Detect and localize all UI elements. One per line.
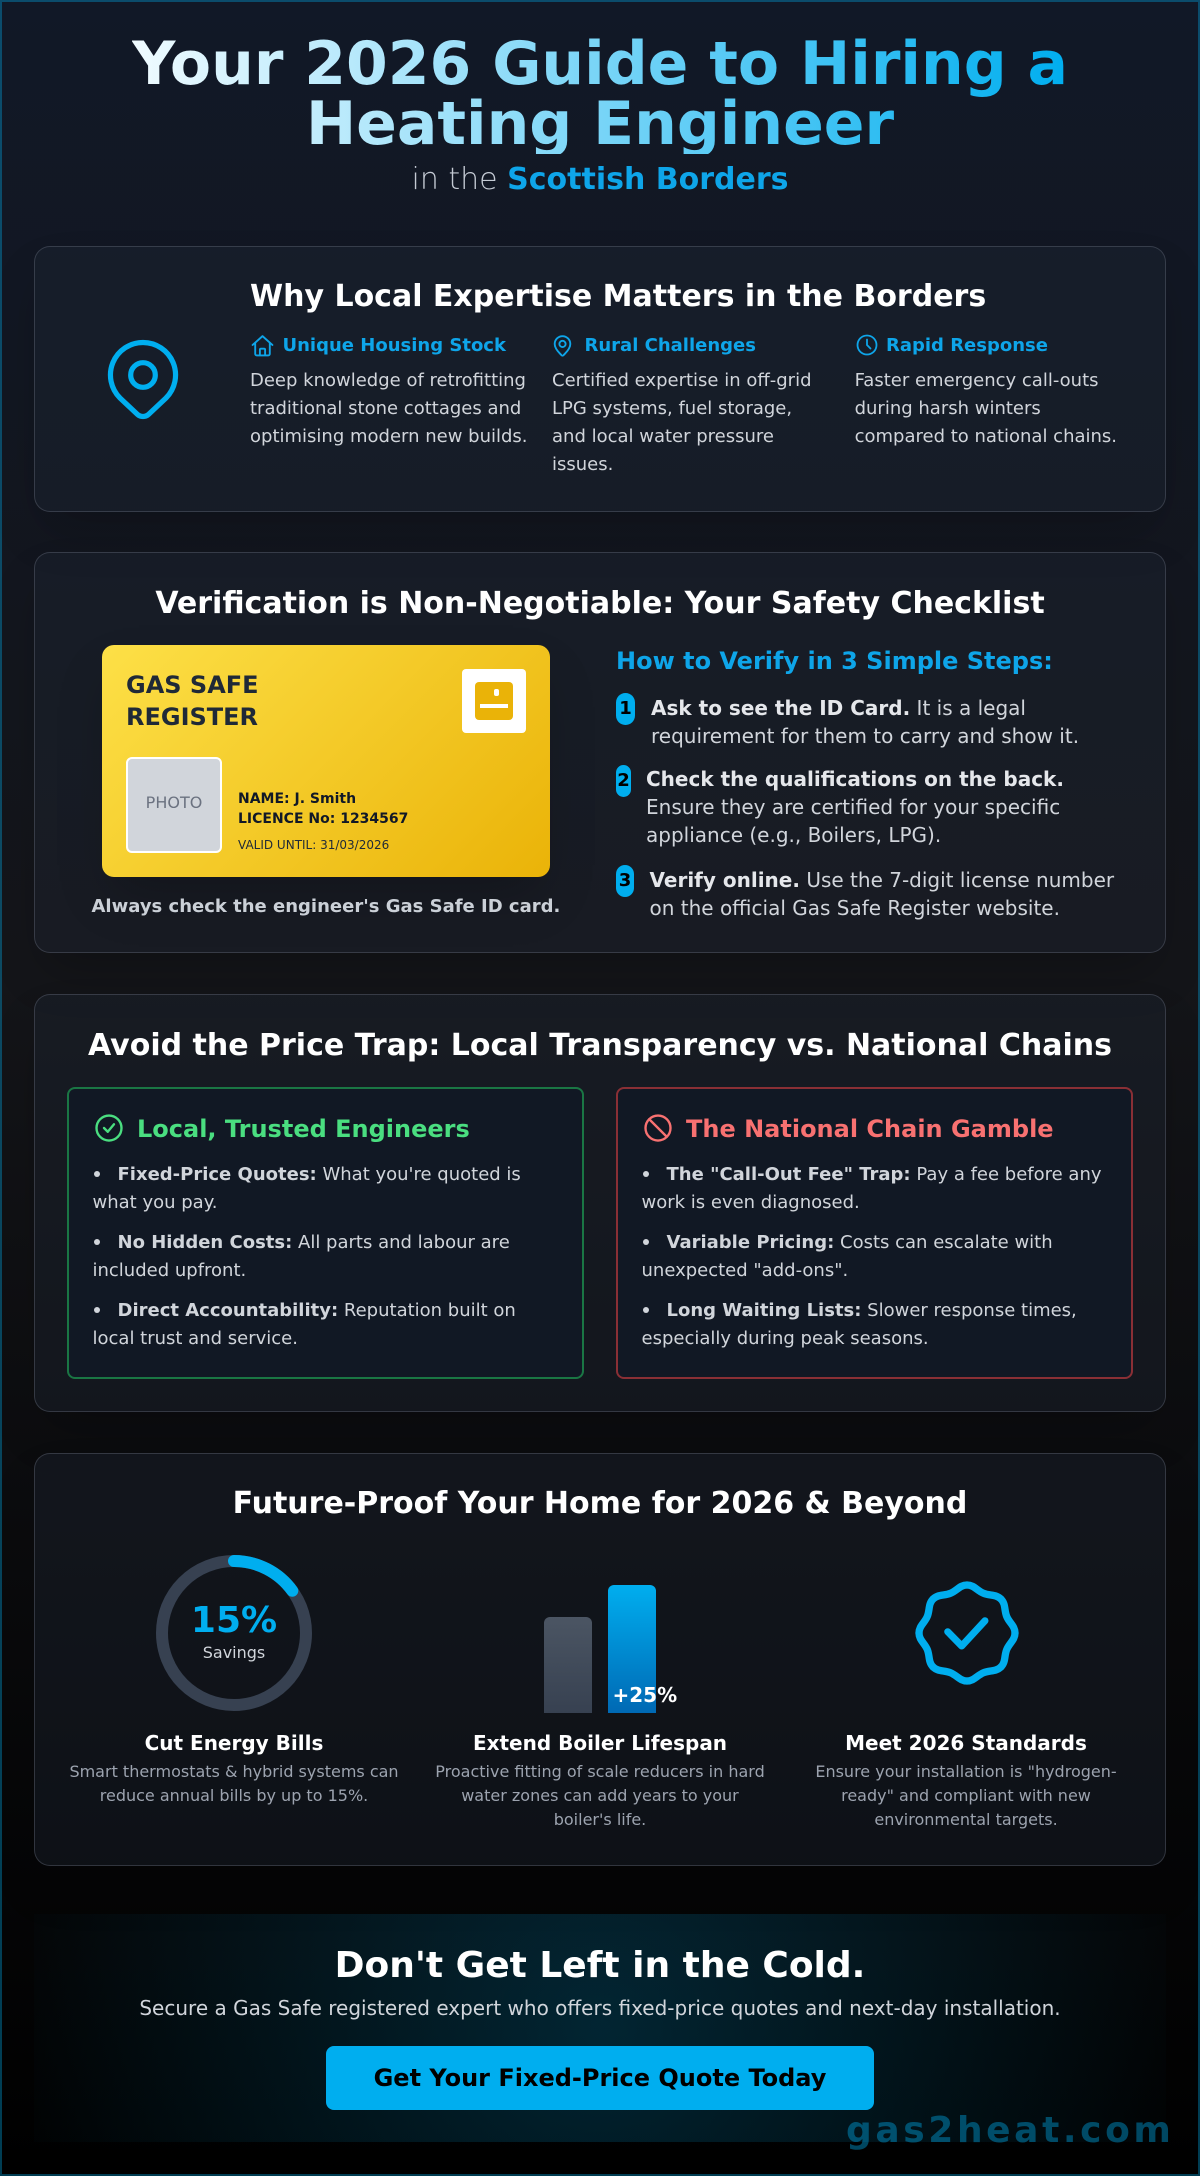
panel: future-proof — [34, 1453, 1166, 1866]
chart: 15% savings ring — [156, 1555, 312, 1711]
step 3 text: on the official Gas Safe Register website. — [650, 896, 1060, 920]
bullet: accountability: local trust and service. — [92, 1328, 298, 1349]
text: rapid response: Faster emergency call-outs — [855, 370, 1099, 391]
cta button: Get Your Fixed-Price Quote Today — [374, 2064, 826, 2092]
bullet: fixed price — [92, 1164, 521, 1213]
heading: verification: Verification is Non-Negotiable: Your Safety Checklist — [155, 586, 1045, 621]
description: lifespan: water zones can add years to your — [461, 1786, 739, 1805]
card title — [126, 671, 259, 731]
icon: clock — [856, 334, 878, 356]
icon: map pin — [108, 340, 178, 420]
step 3 text: Verify online. Use the 7-digit license number — [650, 868, 1114, 892]
step 1 text — [651, 696, 1079, 748]
bullet: variable pricing — [642, 1232, 1053, 1281]
step 2 text: Check the qualifications on the back. — [646, 767, 1064, 791]
step 2 text: Ensure they are certified for your specific — [646, 795, 1060, 819]
bullet: no hidden costs — [92, 1232, 510, 1281]
description: energy bills: Smart thermostats & hybrid systems can — [69, 1762, 399, 1781]
text: rural challenges: LPG systems, fuel storage, — [552, 398, 792, 419]
card title: REGISTER — [126, 703, 258, 731]
bullet: fixed price: what you pay. — [92, 1192, 218, 1213]
bullet: variable pricing: unexpected "add-ons". — [642, 1260, 848, 1281]
bar: standard lifespan — [544, 1617, 592, 1713]
heading: how to verify: How to Verify in 3 Simple Steps: — [616, 647, 1053, 675]
text: rural challenges — [552, 370, 812, 475]
feature: 2026 standards: Meet 2026 Standards — [845, 1731, 1087, 1755]
heading: why local expertise: Why Local Expertise Matters in the Borders — [250, 279, 986, 314]
description: standards: ready" and compliant with new — [841, 1786, 1091, 1805]
card: local engineers — [67, 1087, 584, 1379]
panel: why local expertise — [34, 246, 1166, 512]
step 2 text: appliance (e.g., Boilers, LPG). — [646, 823, 941, 847]
icon: house — [252, 335, 274, 356]
cta button — [326, 2046, 874, 2110]
text: housing stock: optimising modern new builds. — [250, 426, 528, 447]
bullet: call-out fee: work is even diagnosed. — [642, 1192, 860, 1213]
step 2 text — [646, 767, 1064, 847]
bullet: waiting lists: especially during peak seasons. — [642, 1328, 929, 1349]
icon: check badge — [915, 1581, 1019, 1685]
header title: Your 2026 Guide to Hiring a — [132, 29, 1068, 99]
card holder details: NAME: J. Smith — [238, 791, 356, 807]
text: rural challenges: issues. — [552, 454, 613, 475]
step 1 text: requirement for them to carry and show it. — [651, 724, 1079, 748]
feature: extend lifespan: Extend Boiler Lifespan — [473, 1731, 727, 1755]
bullet: accountability: Direct Accountability: Reputation built on — [118, 1300, 516, 1321]
step 2 badge — [616, 765, 631, 797]
description: lifespan: boiler's life. — [554, 1810, 646, 1829]
description: energy bills: reduce annual bills by up to 15%. — [100, 1786, 368, 1805]
call to action band — [34, 1914, 1166, 2142]
header title: Heating Engineer — [306, 89, 894, 159]
icon: no symbol — [644, 1114, 672, 1142]
bullet: fixed price: Fixed-Price Quotes: What you're quoted is — [118, 1164, 521, 1185]
description: lifespan — [435, 1762, 765, 1829]
column: rapid response — [855, 334, 1117, 447]
bullet: waiting lists: Long Waiting Lists: Slower response times, — [666, 1300, 1077, 1321]
bar: extended lifespan — [608, 1585, 656, 1713]
ring value: 15% — [191, 1600, 277, 1641]
cta text: Secure a Gas Safe registered expert who offers fixed-price quotes and next-day installation. — [139, 1996, 1061, 2020]
photo placeholder — [126, 757, 222, 853]
bullet: waiting lists — [642, 1300, 1077, 1349]
step 1 text: Ask to see the ID Card. It is a legal — [651, 696, 1026, 720]
card title: GAS SAFE — [126, 671, 259, 699]
text: rapid response — [855, 370, 1117, 447]
logo glyph — [475, 682, 513, 720]
text: rapid response: compared to national chains. — [855, 426, 1117, 447]
description: standards — [815, 1762, 1117, 1829]
card holder details — [238, 791, 408, 827]
bullet: call-out fee — [642, 1164, 1102, 1213]
text: housing stock: Deep knowledge of retrofitting — [250, 370, 526, 391]
header title — [132, 29, 1068, 159]
chart: lifespan bars — [544, 1585, 677, 1713]
text: rural challenges: Certified expertise in off-grid — [552, 370, 812, 391]
column: unique housing stock — [250, 335, 528, 447]
description: lifespan: Proactive fitting of scale reducers in hard — [435, 1762, 765, 1781]
bullet: no hidden costs: No Hidden Costs: All parts and labour are — [118, 1232, 510, 1253]
watermark: gas2heat.com — [846, 2110, 1175, 2151]
description: energy bills — [69, 1762, 399, 1805]
feature: cut energy bills: Cut Energy Bills — [145, 1731, 323, 1755]
description: standards: environmental targets. — [874, 1810, 1058, 1829]
bullet: no hidden costs: included upfront. — [92, 1260, 246, 1281]
step 3 text — [650, 868, 1114, 920]
bullet: variable pricing: Variable Pricing: Costs can escalate with — [666, 1232, 1053, 1253]
icon: small pin — [554, 335, 572, 357]
icon: check circle — [95, 1114, 123, 1142]
heading: local: Local, Trusted Engineers — [137, 1115, 470, 1143]
column: rural challenges — [552, 335, 812, 475]
step 2 badge: 2 — [617, 770, 630, 791]
heading: price trap: Avoid the Price Trap: Local Transparency vs. National Chains — [88, 1028, 1112, 1063]
card: national chains — [616, 1087, 1132, 1379]
bar label: +25% — [612, 1683, 677, 1707]
card caption: Always check the engineer's Gas Safe ID card. — [92, 896, 560, 917]
card holder details: LICENCE No: 1234567 — [238, 811, 408, 827]
text: rapid response: during harsh winters — [855, 398, 1041, 419]
ring label: Savings — [203, 1643, 265, 1662]
cta heading: Don't Get Left in the Cold. — [335, 1945, 865, 1986]
step 3 badge: 3 — [619, 870, 631, 891]
gas safe id card — [102, 645, 550, 877]
step 1 badge — [616, 693, 635, 725]
panel: price trap comparison — [34, 994, 1166, 1412]
description: standards: Ensure your installation is "hydrogen- — [815, 1762, 1117, 1781]
column: rural challenges: Rural Challenges — [584, 335, 756, 356]
text: housing stock: traditional stone cottages and — [250, 398, 521, 419]
text: rural challenges: and local water pressure — [552, 426, 774, 447]
step 1 badge: 1 — [619, 698, 632, 719]
step 3 badge — [616, 865, 634, 897]
column: rapid response: Rapid Response — [886, 335, 1048, 356]
card validity: VALID UNTIL: 31/03/2026 — [238, 838, 389, 852]
photo placeholder: PHOTO — [146, 793, 202, 812]
heading: national: The National Chain Gamble — [686, 1115, 1054, 1143]
bullet: call-out fee: The "Call-Out Fee" Trap: Pay a fee before any — [666, 1164, 1102, 1185]
bullet: accountability — [92, 1300, 516, 1349]
heading: future-proof: Future-Proof Your Home for 2026 & Beyond — [233, 1486, 967, 1521]
text: housing stock — [250, 370, 528, 447]
card logo — [462, 669, 526, 733]
header subtitle: in the Scottish Borders — [411, 162, 789, 197]
panel: verification checklist — [34, 552, 1166, 953]
column: unique housing stock: Unique Housing Stock — [282, 335, 506, 356]
